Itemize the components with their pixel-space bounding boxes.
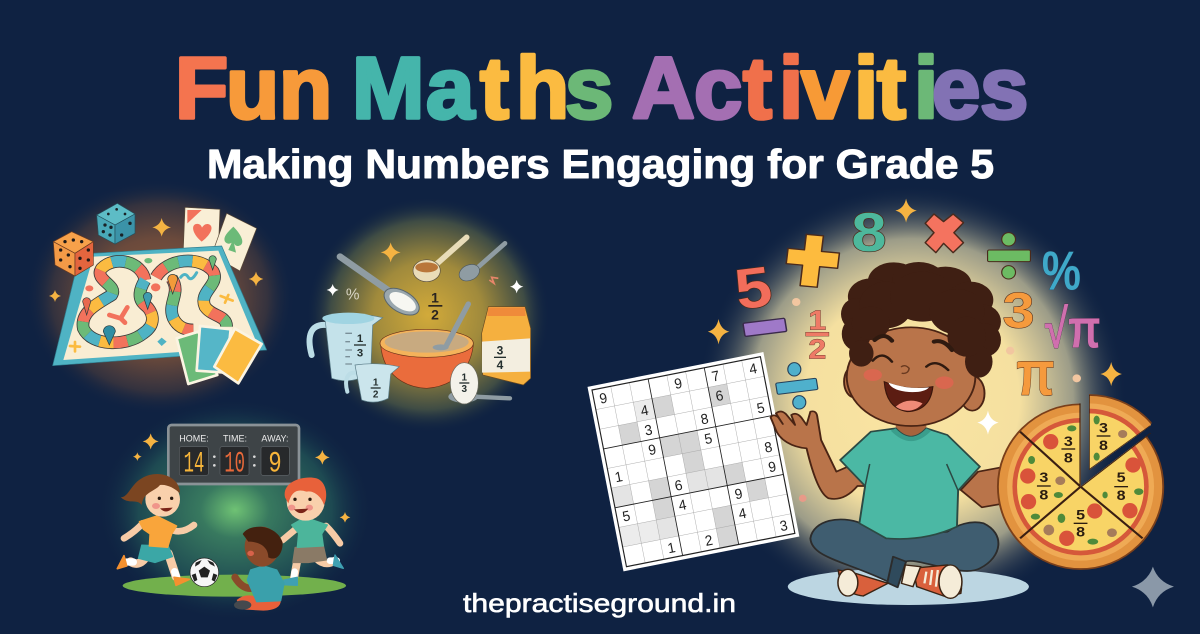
boy head and floating maths symbols <box>708 199 1122 426</box>
sudoku numbers: 1 <box>613 468 624 485</box>
title: F <box>175 40 228 137</box>
fraction 5/8: 5 <box>1076 507 1085 523</box>
flour carton: 3 <box>497 343 504 357</box>
fraction 5/8: 8 <box>1076 525 1085 540</box>
floating one half: 1 <box>431 289 439 305</box>
pizza fractions <box>1037 421 1128 540</box>
sneakers <box>838 565 962 598</box>
arms <box>771 411 1005 507</box>
colons <box>213 455 256 467</box>
sudoku numbers: 9 <box>733 485 744 502</box>
cards in hand <box>177 326 262 384</box>
glow: baking <box>306 197 550 433</box>
cheeks <box>864 369 954 389</box>
mushrooms and herbs <box>1028 425 1143 545</box>
sudoku numbers: 8 <box>763 438 774 456</box>
title: i <box>854 40 878 137</box>
fraction 3/8 on slice <box>1097 421 1110 454</box>
scoop with egg: 3 <box>462 384 468 395</box>
pepperoni <box>1020 434 1141 546</box>
flour carton: 4 <box>497 358 504 372</box>
number 3: 3 <box>1003 283 1035 338</box>
main pizza <box>998 403 1163 569</box>
small measuring cup: 2 <box>373 389 379 400</box>
orange mixing bowl <box>380 304 473 388</box>
fraction 3/8 <box>1061 434 1075 466</box>
neck <box>896 423 926 442</box>
sudoku numbers: 8 <box>699 410 710 428</box>
small dots <box>792 298 1081 382</box>
large measuring cup <box>310 313 383 381</box>
sudoku numbers: 9 <box>647 441 658 458</box>
title: t <box>877 40 906 137</box>
divide sign green <box>988 233 1030 279</box>
white sparkles <box>327 280 523 296</box>
fraction 3/8: 8 <box>1039 487 1048 503</box>
fraction 3/8 on slice: 8 <box>1099 438 1108 454</box>
illustration: board game and baking <box>49 203 531 404</box>
grass <box>123 575 346 597</box>
large measuring cup: 3 <box>357 348 363 360</box>
face <box>847 327 975 426</box>
glow: board game <box>25 179 295 415</box>
sudoku numbers: 3 <box>643 421 654 439</box>
fraction 5/8 <box>1074 507 1087 540</box>
percent sign: % <box>346 286 360 303</box>
sudoku numbers: 5 <box>755 399 766 416</box>
sparkles <box>49 218 401 302</box>
number 5: 5 <box>730 254 776 321</box>
fraction 3/8: 3 <box>1039 470 1048 486</box>
score labels: HOME: <box>179 434 209 444</box>
title: t <box>480 40 509 137</box>
white sparkle <box>977 411 999 435</box>
tan scoop <box>413 237 467 282</box>
sudoku numbers: 6 <box>673 476 684 494</box>
sitting boy <box>234 527 284 611</box>
title: h <box>516 40 569 137</box>
pawns <box>83 256 216 345</box>
scoop with egg <box>448 363 510 404</box>
scoreboard <box>168 425 299 484</box>
divide sign blue <box>776 363 818 409</box>
crossed legs <box>810 519 998 587</box>
sparkles <box>133 433 350 523</box>
sudoku numbers: 4 <box>677 496 688 514</box>
sudoku numbers: 5 <box>621 507 632 525</box>
cut slice <box>1089 394 1152 470</box>
title: M <box>352 40 424 137</box>
fraction 3/8 <box>1037 470 1051 503</box>
sudoku numbers: 9 <box>598 389 609 407</box>
title: i <box>914 40 938 137</box>
minus sign <box>743 318 787 336</box>
ears <box>844 366 985 411</box>
curly hair <box>841 262 1001 378</box>
small dot <box>799 495 807 502</box>
board decorations <box>70 258 233 351</box>
title: A <box>632 40 695 137</box>
sparkles <box>708 199 1122 386</box>
footer website: thepractiseground.in <box>463 588 736 618</box>
flour carton <box>482 307 531 385</box>
girl <box>117 474 194 585</box>
blue die <box>97 203 135 244</box>
sudoku numbers <box>598 360 789 564</box>
multiply sign <box>925 214 963 253</box>
floating one half: 1 <box>808 305 826 336</box>
sudoku numbers: 9 <box>673 374 684 392</box>
sudoku numbers: 4 <box>748 360 758 377</box>
fraction 5/8: 5 <box>1117 470 1126 486</box>
orange die <box>53 232 93 276</box>
pizza <box>998 395 1172 569</box>
small measuring cup: 1 <box>373 377 379 388</box>
fraction 5/8 <box>1114 470 1128 504</box>
fraction 3/8: 8 <box>1064 451 1073 466</box>
title: v <box>801 40 849 137</box>
score labels: AWAY: <box>261 434 289 444</box>
sudoku grid <box>587 352 799 571</box>
title: u <box>226 40 279 137</box>
glow: football <box>97 398 373 622</box>
playing cards behind board <box>183 207 257 271</box>
floor shadow <box>788 568 1029 605</box>
glow: boy <box>697 185 1127 615</box>
sudoku numbers: 4 <box>639 401 650 419</box>
percent sign: % <box>1042 239 1081 301</box>
title: a <box>426 40 475 137</box>
title: n <box>279 40 356 137</box>
shaded cells <box>596 380 776 567</box>
sudoku numbers: 2 <box>703 531 714 549</box>
scoop with egg: 1 <box>462 373 468 384</box>
t-shirt <box>840 428 980 539</box>
large measuring cup: 1 <box>357 333 363 345</box>
sudoku numbers: 3 <box>778 517 789 534</box>
red-haired boy <box>283 477 343 585</box>
game board <box>53 246 267 366</box>
number 8: 8 <box>851 201 887 263</box>
eyes and brows <box>873 336 952 373</box>
grey sparkle <box>1132 567 1174 607</box>
football <box>190 558 219 587</box>
floating one half: 2 <box>431 306 439 322</box>
digits: 10 <box>224 447 245 480</box>
title: s <box>565 40 638 137</box>
fraction 5/8: 8 <box>1117 488 1126 504</box>
title: s <box>980 40 1028 137</box>
sudoku numbers: 6 <box>714 387 725 404</box>
laughing mouth <box>884 382 933 412</box>
small squiggle <box>489 277 498 283</box>
square root of pi: √π <box>1045 297 1100 359</box>
floating one half <box>806 305 829 365</box>
title: t <box>743 40 772 137</box>
digits: 9 <box>268 447 282 480</box>
score labels <box>179 434 289 444</box>
plus sign <box>784 233 841 289</box>
sudoku numbers: 9 <box>767 458 778 475</box>
snake track <box>83 261 227 343</box>
sudoku numbers: 4 <box>737 504 748 522</box>
floating one half <box>428 289 442 322</box>
title: i <box>779 40 803 137</box>
score labels: TIME: <box>223 434 247 444</box>
illustration: football scoreboard <box>117 425 350 611</box>
boy body and pizza <box>771 395 1174 607</box>
subtitle: Making Numbers Engaging for Grade 5 <box>207 141 994 187</box>
sudoku numbers: 7 <box>710 367 721 385</box>
digits: 14 <box>184 447 204 480</box>
fraction 3/8 on slice: 3 <box>1099 421 1108 436</box>
small measuring cup <box>346 364 399 402</box>
digit panels <box>179 447 289 475</box>
sudoku numbers: 5 <box>703 430 714 447</box>
digits <box>184 447 282 480</box>
pi symbol: π <box>1016 338 1055 409</box>
title: c <box>694 40 742 137</box>
title: e <box>932 40 980 137</box>
sudoku numbers: 1 <box>666 539 677 556</box>
small spoon <box>456 243 505 284</box>
floating one half: 2 <box>808 335 826 365</box>
fraction 3/8: 3 <box>1064 434 1073 450</box>
big spoon <box>340 257 424 321</box>
